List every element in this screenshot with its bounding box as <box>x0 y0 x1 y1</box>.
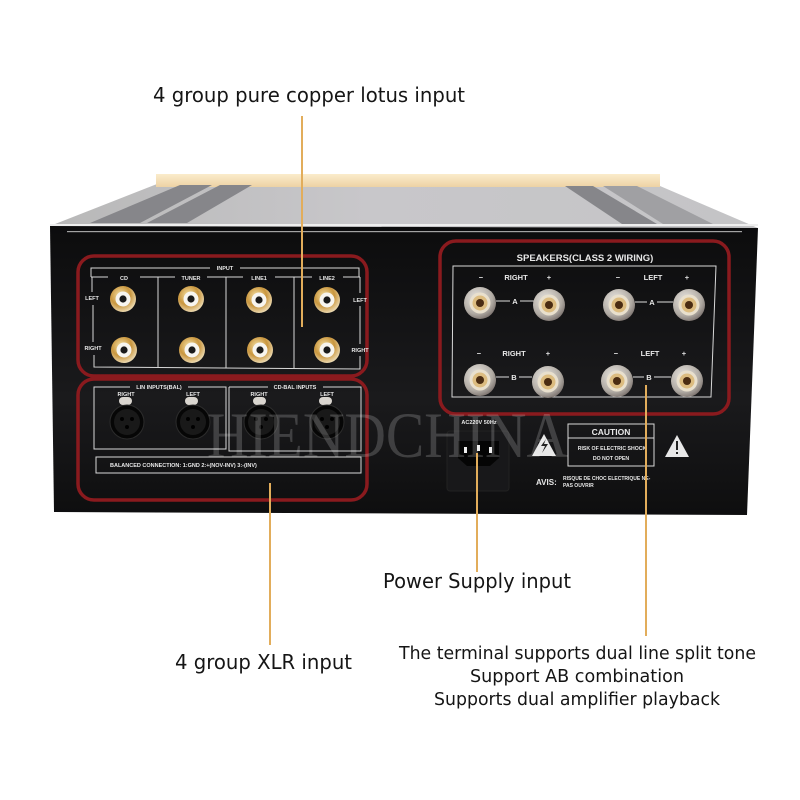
input labels: LEFT <box>353 298 368 304</box>
speakers heading: SPEAKERS(CLASS 2 WIRING) <box>517 253 653 264</box>
terminal labels: RIGHT <box>502 349 526 358</box>
terminal labels <box>477 273 690 382</box>
terminal connector lines <box>496 301 673 377</box>
terminal labels: − <box>614 349 619 358</box>
XLR labels: LEFT <box>186 392 201 398</box>
input labels: INPUT <box>217 266 234 272</box>
input labels: TUNER <box>182 276 200 282</box>
heading: RCA input caption: 4 group pure copper lotus input <box>153 83 465 107</box>
arrow: speaker terminal leader <box>645 385 647 636</box>
XLR labels: CD-BAL INPUTS <box>274 385 317 391</box>
input labels: LINE1 <box>251 276 267 282</box>
AVIS notice <box>536 476 651 489</box>
caution box: CAUTION <box>592 427 630 437</box>
text block: terminal features <box>398 643 756 710</box>
inlet housing <box>447 431 509 491</box>
text block: terminal features: The terminal supports dual line split tone <box>398 643 756 664</box>
heading: power supply caption: Power Supply input <box>383 569 571 593</box>
AVIS notice: AVIS: <box>536 478 557 487</box>
XLR labels: RIGHT <box>117 392 135 398</box>
heading: XLR input caption: 4 group XLR input <box>175 650 352 674</box>
input labels <box>84 266 369 354</box>
arrow: RCA input leader <box>301 116 303 327</box>
panel: speaker terminals <box>440 241 729 414</box>
arrow: XLR input leader <box>269 483 271 645</box>
input printed frame <box>91 268 360 369</box>
terminal labels: + <box>546 349 551 358</box>
terminal labels: + <box>547 273 552 282</box>
XLR labels: LIN INPUTS(BAL) <box>136 385 182 391</box>
terminal labels: + <box>685 273 690 282</box>
input labels: RIGHT <box>84 346 102 352</box>
XLR labels: BALANCED CONNECTION: 1:GND 2:+(NOV-INV) 3:-(INV) <box>110 463 257 469</box>
text block: terminal features: Support AB combination <box>470 666 684 687</box>
AC rating text: AC220V 50Hz <box>461 420 497 426</box>
terminal labels: + <box>682 349 687 358</box>
watermark: HIENDCHINA <box>207 400 568 472</box>
XLR labels <box>110 385 335 469</box>
RCA connectors <box>110 286 340 363</box>
speakers printed frame <box>452 266 716 397</box>
input labels: CD <box>120 276 128 282</box>
terminal labels: B <box>511 373 517 382</box>
power inlet <box>447 420 509 491</box>
XLR labels: RIGHT <box>250 392 268 398</box>
red highlight frame <box>78 256 367 376</box>
terminal labels: A <box>512 297 518 306</box>
ventilation slots <box>90 185 713 224</box>
arrow: power supply leader <box>476 453 478 572</box>
amplifier chassis <box>50 174 758 515</box>
binding posts <box>464 287 705 398</box>
terminal labels: − <box>479 273 484 282</box>
inlet pins <box>464 445 492 453</box>
caution box <box>568 424 654 466</box>
terminal labels: LEFT <box>644 273 663 282</box>
terminal labels: − <box>477 349 482 358</box>
terminal labels: A <box>649 298 655 307</box>
text block: terminal features: Supports dual amplifier playback <box>434 689 721 710</box>
input labels: LINE2 <box>319 276 335 282</box>
red highlight frame <box>440 241 729 414</box>
rear panel <box>50 226 758 515</box>
icon: high voltage warning <box>532 434 556 456</box>
input labels: RIGHT <box>351 348 369 354</box>
icon: exclamation warning <box>665 435 689 457</box>
inlet socket <box>458 441 499 466</box>
terminal labels: LEFT <box>641 349 660 358</box>
caution box: DO NOT OPEN <box>593 456 629 462</box>
input labels: LEFT <box>85 296 100 302</box>
terminal labels: B <box>646 373 652 382</box>
terminal labels: − <box>616 273 621 282</box>
red highlight frame <box>78 379 367 500</box>
panel: XLR input group <box>78 379 367 500</box>
XLR connectors <box>110 405 344 439</box>
label pills <box>119 397 332 405</box>
AVIS notice: RISQUE DE CHOC ELECTRIQUE NE- <box>563 476 651 482</box>
wooden rear edge <box>156 174 660 187</box>
top cover <box>50 184 758 228</box>
terminal labels: RIGHT <box>504 273 528 282</box>
caution box: RISK OF ELECTRIC SHOCK <box>578 446 647 452</box>
XLR printed frames <box>94 387 361 473</box>
AVIS notice: PAS OUVRIR <box>563 483 594 489</box>
panel: RCA input group <box>78 256 369 376</box>
XLR labels: LEFT <box>320 392 335 398</box>
